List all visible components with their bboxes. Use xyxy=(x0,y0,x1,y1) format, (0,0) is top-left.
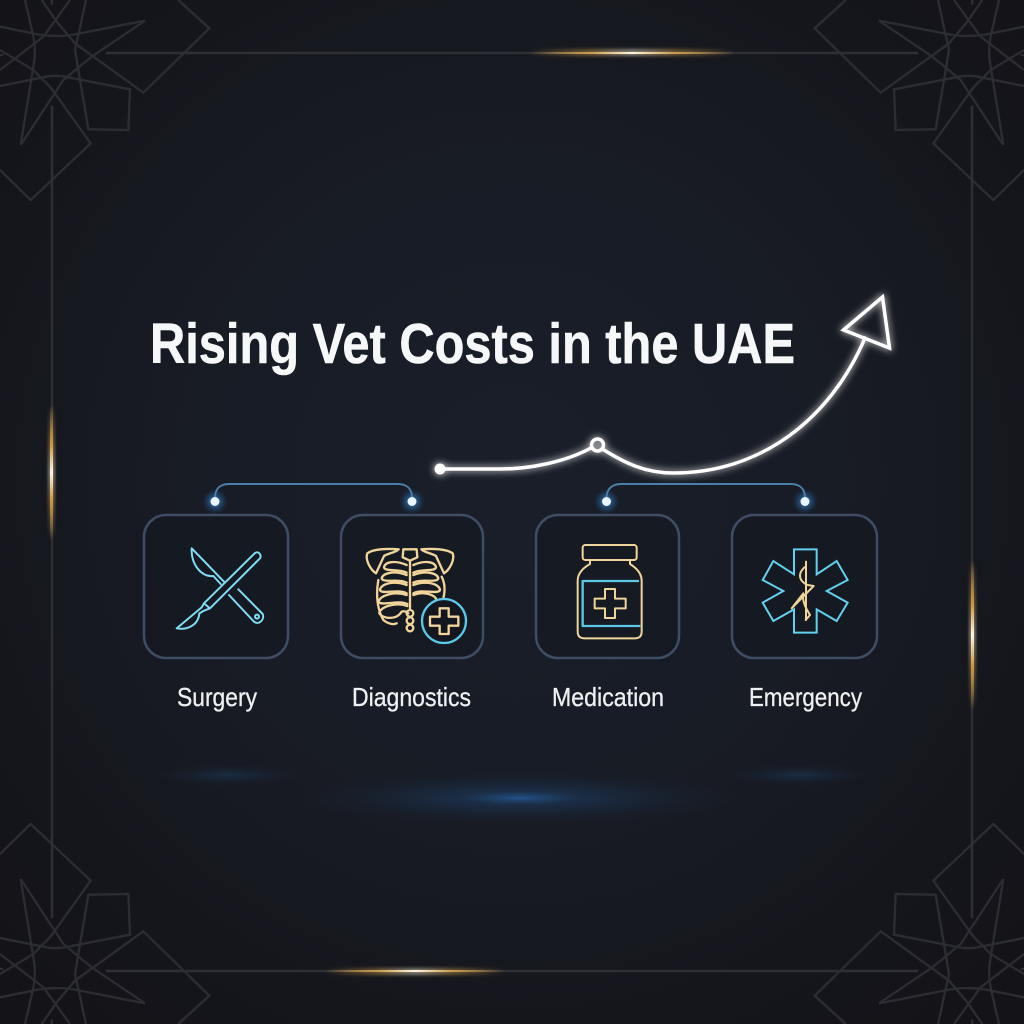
rising trend arrow xyxy=(434,297,890,474)
label: surgery: Surgery xyxy=(177,682,257,712)
panel: surgery xyxy=(144,515,288,658)
label: emergency: Emergency xyxy=(749,682,862,712)
title: Rising Vet Costs in the UAE xyxy=(150,312,795,376)
bottom glow: centre xyxy=(300,772,740,824)
connector: surgery to diagnostics xyxy=(202,484,425,514)
corner ornament: top right xyxy=(815,0,1024,200)
icon: medicine bottle xyxy=(578,545,642,638)
corner ornament: top left xyxy=(0,0,209,200)
icon: star of life xyxy=(763,549,848,633)
panel: emergency xyxy=(732,515,877,658)
corner ornament: bottom right xyxy=(815,824,1024,1024)
bottom glow: left xyxy=(156,764,300,786)
connector: medication to emergency xyxy=(594,484,818,514)
label: diagnostics: Diagnostics xyxy=(352,682,471,712)
panel: diagnostics xyxy=(341,515,483,658)
corner ornament: bottom left xyxy=(0,824,209,1024)
label: medication: Medication xyxy=(552,682,664,712)
gold highlight: bottom xyxy=(325,968,505,975)
icon: crossed scalpels xyxy=(177,548,263,629)
icon: rib cage with plus badge xyxy=(367,549,466,643)
gold highlight: top xyxy=(530,49,735,56)
gold highlight: right xyxy=(969,560,976,710)
gold highlight: left xyxy=(48,405,55,540)
bottom glow: right xyxy=(728,764,872,786)
panel: medication xyxy=(536,515,679,658)
